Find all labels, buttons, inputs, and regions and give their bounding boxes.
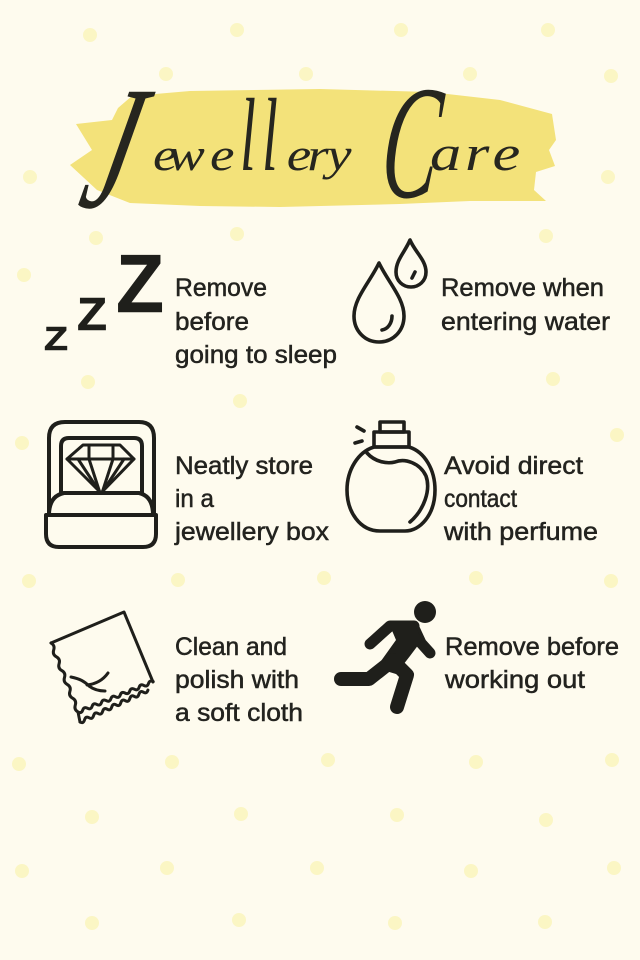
icon: sleeping zzz: Z <box>77 288 107 340</box>
text: remove before working out <box>444 633 619 694</box>
text: avoid direct contact with perfume <box>443 452 598 546</box>
text: remove before working out: working out <box>444 666 585 694</box>
icon: sleeping zzz: Z <box>44 320 68 357</box>
text: remove before going to sleep: Remove <box>175 274 267 302</box>
text: clean and polish with a soft cloth: Clean and <box>175 633 287 661</box>
icon: running person <box>341 601 436 707</box>
icon: perfume bottle <box>347 422 435 531</box>
text: avoid direct contact with perfume: with perfume <box>443 518 598 546</box>
title: J <box>66 52 166 246</box>
text: avoid direct contact with perfume: contact <box>444 485 517 513</box>
text: avoid direct contact with perfume: Avoid direct <box>444 452 583 480</box>
text: remove before going to sleep <box>175 274 337 369</box>
text: neatly store in a jewellery box: Neatly store <box>175 452 313 480</box>
text: remove before going to sleep: before <box>175 308 249 336</box>
title: C <box>374 53 450 233</box>
title: l <box>240 78 256 194</box>
title <box>66 52 520 246</box>
text: neatly store in a jewellery box <box>174 452 330 546</box>
text: remove when entering water: entering water <box>441 308 610 336</box>
text: clean and polish with a soft cloth: a soft cloth <box>175 699 303 727</box>
title: eweery <box>153 129 352 180</box>
text: remove before working out: Remove before <box>445 633 619 661</box>
text: clean and polish with a soft cloth <box>175 633 303 727</box>
title: are <box>430 127 520 181</box>
text: remove when entering water: Remove when <box>441 274 604 302</box>
text: remove when entering water <box>441 274 610 336</box>
icon: sleeping zzz: Z <box>116 237 164 330</box>
yellow brush stroke behind title <box>70 89 556 207</box>
icon: jewellery box with diamond <box>46 422 156 547</box>
text: clean and polish with a soft cloth: polish with <box>175 666 299 694</box>
title: l <box>262 78 278 194</box>
icon: polishing cloth <box>51 612 153 723</box>
icon: water drops <box>354 240 426 342</box>
text: neatly store in a jewellery box: in a <box>175 485 214 513</box>
icon: sleeping zzz <box>44 237 164 357</box>
text: remove before going to sleep: going to sleep <box>175 341 337 369</box>
text: neatly store in a jewellery box: jewellery box <box>174 518 330 546</box>
